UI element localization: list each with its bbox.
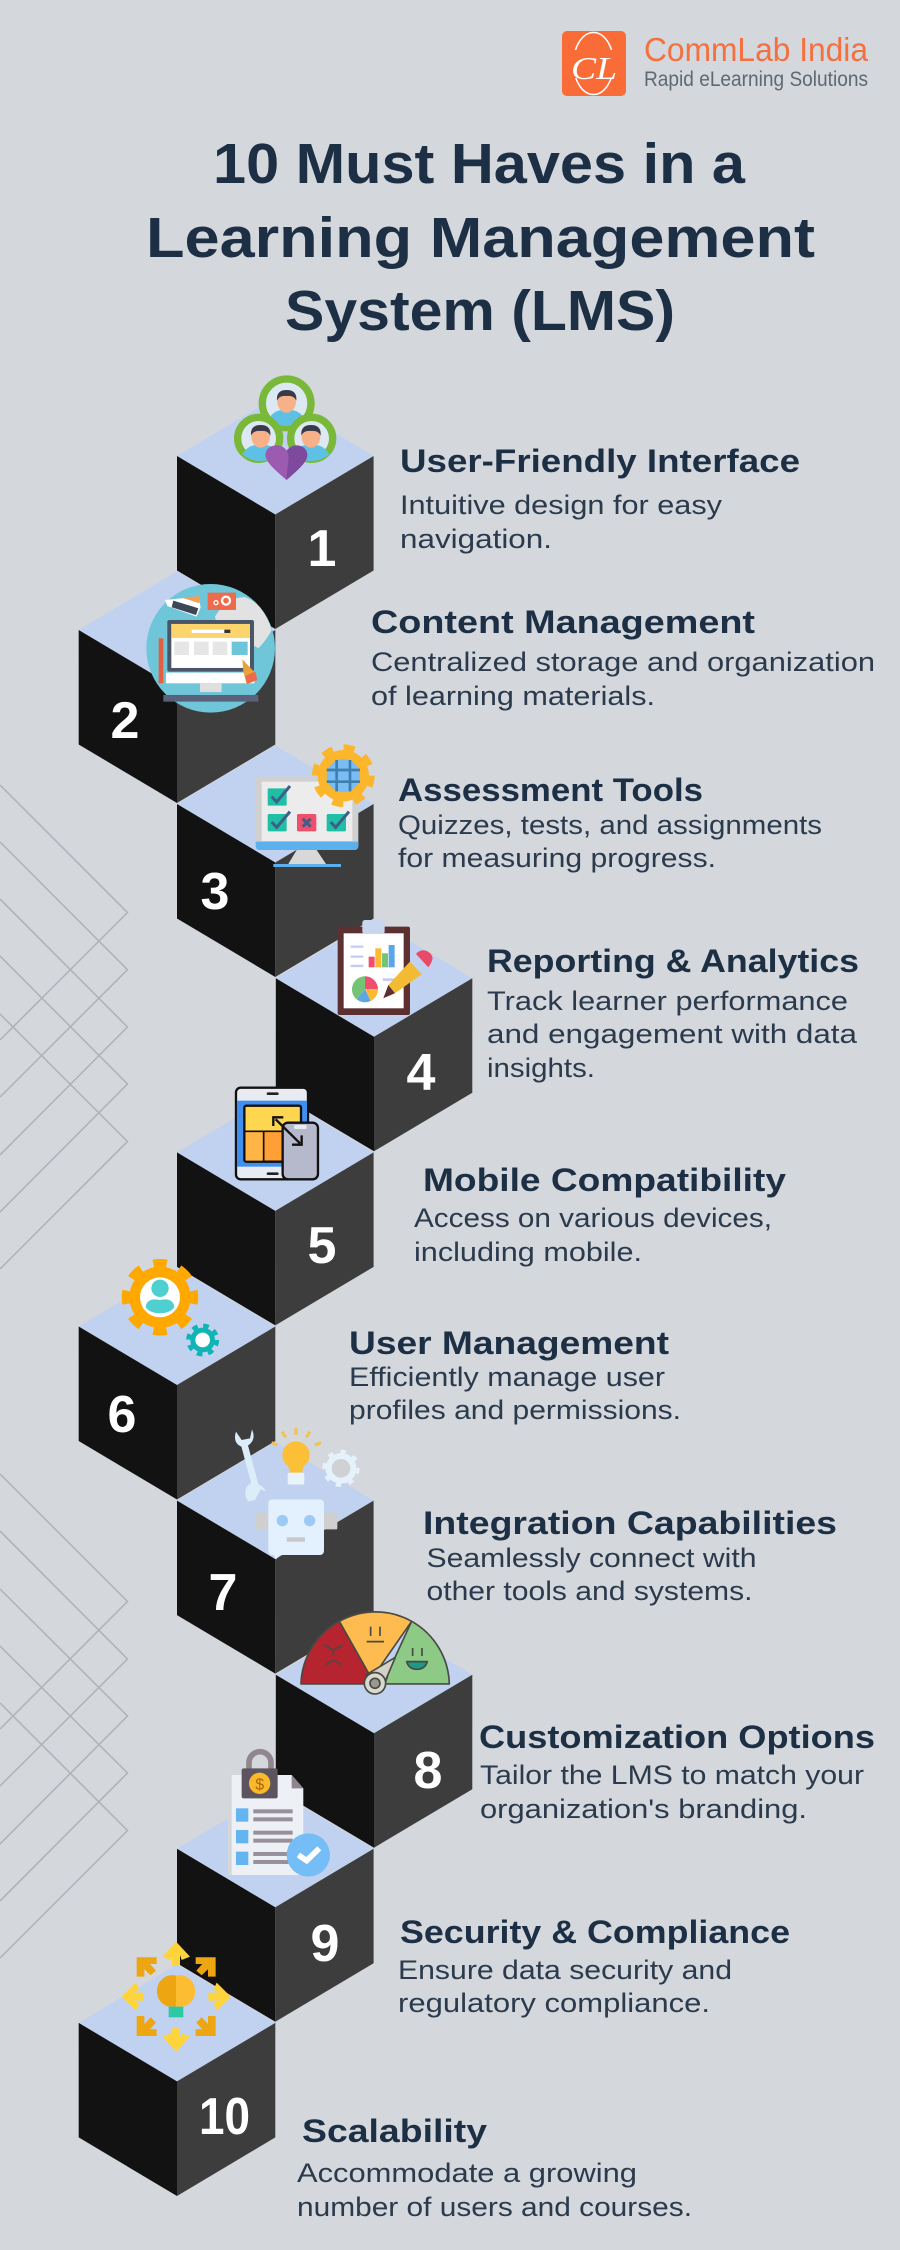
text: content management: [371, 604, 875, 711]
icon: users with heart: [238, 379, 333, 480]
text: user-friendly interface: User-Friendly Interface: [400, 443, 800, 479]
cube 2: [79, 572, 275, 803]
text: integration capabilities: [423, 1505, 837, 1606]
text: integration capabilities: other tools and systems.: [426, 1576, 752, 1606]
cube 3: 3: [201, 863, 229, 921]
cube 8: [276, 1616, 472, 1848]
icon: gauge with faces: [301, 1612, 449, 1694]
text: customization options: organization's branding.: [480, 1794, 807, 1824]
text: mobile compatibility: Mobile Compatibility: [423, 1162, 786, 1198]
logo: CommLab India: CommLab India: [644, 31, 869, 68]
cube 9: [177, 1790, 374, 2022]
text: scalability: number of users and courses.: [297, 2192, 692, 2222]
text: scalability: Scalability: [302, 2113, 487, 2149]
text: user management: User Management: [349, 1325, 669, 1361]
text: reporting and analytics: [487, 943, 859, 1083]
text: security and compliance: Security & Compliance: [400, 1914, 790, 1950]
text: customization options: Customization Options: [479, 1719, 875, 1755]
text: content management: Content Management: [371, 604, 755, 640]
title: Learning Management: [146, 206, 815, 270]
text: customization options: [479, 1719, 875, 1824]
cube 3: [177, 746, 374, 977]
text: content management: Centralized storage and organization: [371, 647, 875, 677]
cube 8: 8: [414, 1742, 442, 1800]
title: 10 Must Haves in a: [213, 132, 746, 196]
text: mobile compatibility: including mobile.: [414, 1237, 642, 1267]
icon: secure document: $: [255, 1776, 264, 1793]
text: integration capabilities: Seamlessly connect with: [426, 1543, 756, 1573]
cube 4: 4: [407, 1044, 436, 1102]
title: [146, 132, 815, 343]
cube 4: [276, 920, 472, 1151]
text: reporting and analytics: Reporting & Analytics: [487, 943, 859, 979]
text: security and compliance: [398, 1914, 790, 2018]
icon: reporting clipboard: [338, 920, 433, 1015]
cube 10: [79, 1964, 275, 2196]
text: user-friendly interface: navigation.: [400, 524, 552, 554]
text: assessment tools: Assessment Tools: [398, 772, 703, 808]
text: user-friendly interface: [400, 443, 800, 554]
cube 2: 2: [111, 692, 139, 750]
cube 6: [79, 1268, 275, 1500]
text: user management: Efficiently manage user: [349, 1362, 665, 1392]
text: scalability: [297, 2113, 692, 2222]
text: mobile compatibility: Access on various devices,: [414, 1203, 772, 1233]
cube 5: 5: [308, 1217, 336, 1275]
text: customization options: Tailor the LMS to match your: [480, 1760, 864, 1790]
icon: content monitor: [146, 584, 275, 713]
text: assessment tools: [398, 772, 822, 873]
text: user management: [349, 1325, 681, 1425]
text: assessment tools: for measuring progress.: [398, 843, 716, 873]
icon: mobile and tablet: [236, 1088, 318, 1179]
logo: CommLab India: [562, 31, 869, 96]
text: mobile compatibility: [414, 1162, 786, 1267]
text: user-friendly interface: Intuitive design for easy: [400, 490, 723, 520]
cube 10: 10: [199, 2088, 250, 2146]
text: reporting and analytics: insights.: [487, 1053, 595, 1083]
text: user management: profiles and permissions.: [349, 1395, 681, 1425]
text: reporting and analytics: and engagement with data: [487, 1019, 858, 1049]
icon: user management gears: [126, 1263, 217, 1354]
cube 1: [177, 398, 374, 629]
cube 7: [177, 1442, 374, 1674]
icon: scalability bulb with arrows: [122, 1942, 231, 2052]
cube 9: 9: [311, 1915, 339, 1973]
icon: integration robot, wrench, bulb, gear: [235, 1428, 358, 1559]
logo: CommLab India: Rapid eLearning Solutions: [644, 68, 868, 91]
text: integration capabilities: Integration Capabilities: [423, 1505, 837, 1541]
text: reporting and analytics: Track learner performance: [487, 986, 848, 1016]
cube 6: 6: [108, 1386, 136, 1444]
title: System (LMS): [285, 279, 675, 343]
text: scalability: Accommodate a growing: [297, 2158, 637, 2188]
cube 1: 1: [308, 520, 336, 578]
cube 5: [177, 1094, 374, 1325]
text: content management: of learning materials.: [371, 681, 655, 711]
cube 7: 7: [209, 1564, 237, 1622]
text: assessment tools: Quizzes, tests, and assignments: [398, 810, 822, 840]
text: security and compliance: Ensure data security and: [398, 1955, 732, 1985]
icon: assessment monitor and gear: [256, 748, 371, 867]
text: security and compliance: regulatory compliance.: [398, 1988, 710, 2018]
icon: secure document: [228, 1752, 330, 1877]
logo: CommLab India: CL: [571, 50, 617, 86]
